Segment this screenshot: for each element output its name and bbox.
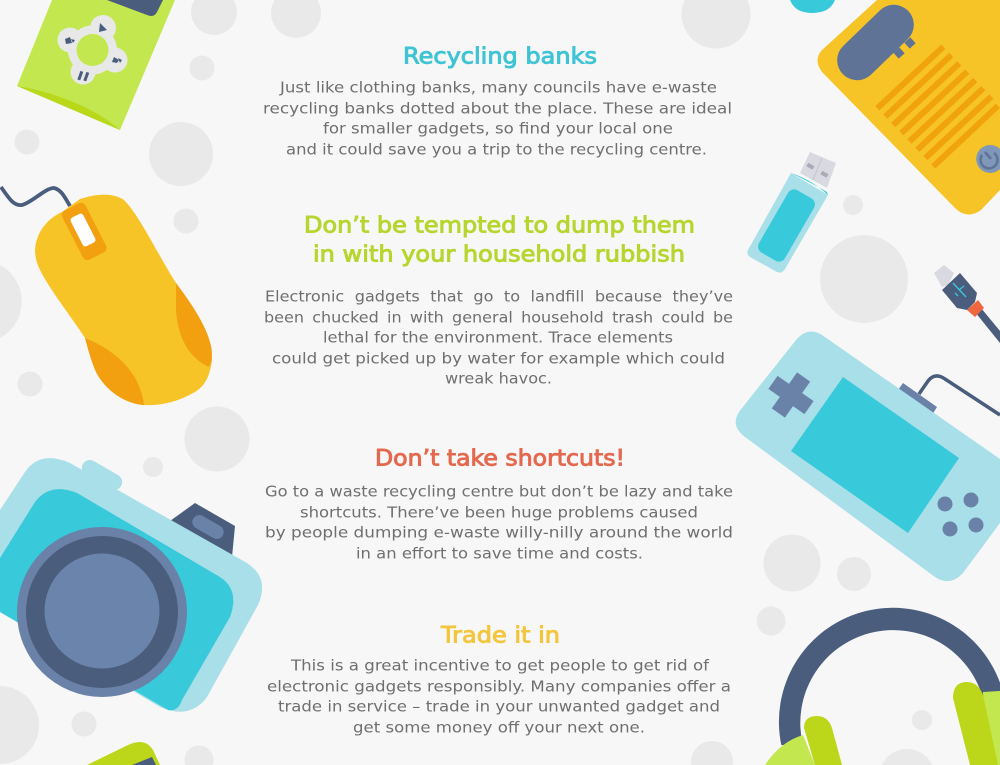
icon: handheld game console bbox=[736, 331, 1000, 581]
text block: household rubbish: lethal for the environment. Trace elements bbox=[323, 328, 673, 346]
text block: household rubbish: been chucked in with general household trash could be bbox=[264, 308, 733, 326]
text block: shortcuts: by people dumping e-waste willy-nilly around the world bbox=[265, 524, 733, 542]
icon: mp3 player bbox=[17, 0, 175, 130]
text block: shortcuts: shortcuts. There’ve been huge problems caused bbox=[300, 504, 698, 522]
icon: partial green device bbox=[87, 742, 160, 765]
text block: household rubbish: could get picked up by water for example which could bbox=[272, 350, 725, 368]
icon: usb stick bbox=[747, 152, 836, 273]
text block: recycling banks: recycling banks dotted about the place. These are ideal bbox=[263, 100, 732, 118]
text block: trade it in: electronic gadgets responsibly. Many companies offer a bbox=[267, 678, 731, 696]
icon: teal blob bbox=[790, 0, 835, 13]
heading: Don't take shortcuts: Don’t take shortcuts! bbox=[375, 446, 625, 472]
text block: shortcuts bbox=[265, 482, 733, 562]
icon: usb cable bbox=[934, 265, 1000, 343]
text block: recycling banks: for smaller gadgets, so find your local one bbox=[323, 120, 673, 138]
text block: trade it in bbox=[267, 656, 731, 736]
text block: shortcuts: in an effort to save time and costs. bbox=[356, 544, 643, 562]
heading: household rubbish: Don’t be tempted to dump them bbox=[304, 214, 695, 238]
text block: trade it in: get some money off your next one. bbox=[353, 718, 645, 736]
icon: computer mouse bbox=[1, 187, 212, 405]
text block: recycling banks: Just like clothing banks, many councils have e-waste bbox=[279, 78, 717, 96]
heading: Trade it in: Trade it in bbox=[440, 624, 560, 648]
text block: trade it in: trade in service – trade in your unwanted gadget and bbox=[278, 698, 720, 716]
icon: camera bbox=[0, 457, 262, 712]
text block: shortcuts: Go to a waste recycling centre but don’t be lazy and take bbox=[265, 482, 733, 500]
heading: household rubbish: in with your household rubbish bbox=[313, 242, 685, 268]
text block: recycling banks bbox=[263, 78, 732, 158]
text block: trade it in: This is a great incentive to get people to get rid of bbox=[290, 656, 710, 674]
icon: headphones bbox=[765, 608, 1000, 765]
text block: household rubbish bbox=[264, 288, 733, 388]
heading: household rubbish bbox=[304, 214, 695, 268]
text block: recycling banks: and it could save you a trip to the recycling centre. bbox=[286, 140, 707, 158]
icon: portable radio bbox=[818, 0, 1000, 215]
text block: household rubbish: Electronic gadgets that go to landfill because they’ve bbox=[265, 288, 733, 306]
text block: household rubbish: wreak havoc. bbox=[445, 370, 552, 388]
heading: Recycling banks: Recycling banks bbox=[403, 44, 597, 70]
